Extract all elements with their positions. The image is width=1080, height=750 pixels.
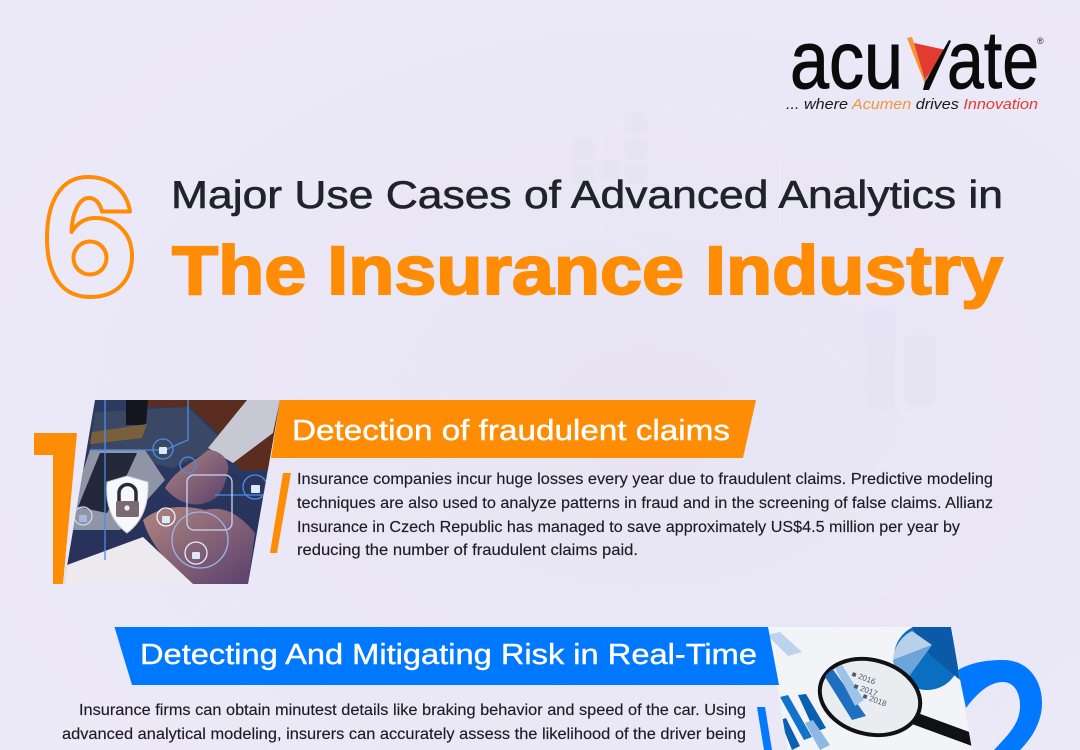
logo black v stroke bbox=[923, 40, 951, 90]
body text: techniques are also used to analyze patterns in fraud and in the screening of false claims. Allianz bbox=[297, 495, 993, 512]
title line 2: The Insurance Industry bbox=[172, 232, 1003, 309]
header bar: detecting and mitigating risk bbox=[114, 627, 779, 685]
title line 1: Major Use Cases of Advanced Analytics in bbox=[171, 174, 1003, 217]
logo wordmark end: ate bbox=[947, 15, 1039, 106]
magnifier lens: ■ 2016 bbox=[850, 669, 877, 687]
body text: reducing the number of fraudulent claims paid. bbox=[297, 542, 638, 559]
pie chart bbox=[893, 624, 960, 690]
logo orange stripe bbox=[907, 37, 928, 84]
body text bbox=[297, 471, 993, 559]
bar chart bbox=[780, 694, 830, 750]
logo registered mark: ® bbox=[1037, 36, 1044, 46]
logo tagline: ... where Acumen drives Innovation bbox=[786, 96, 1038, 113]
numeral 1 bbox=[34, 433, 77, 584]
body text: advanced analytical modeling, insurers can accurately assess the likelihood of the driver being bbox=[62, 726, 746, 743]
photo: hands with security locks bbox=[60, 400, 285, 584]
panel: use case 1 bbox=[34, 400, 993, 584]
logo red triangle bbox=[914, 43, 946, 80]
magnifier lens bbox=[818, 656, 922, 738]
body text: Insurance companies incur huge losses every year due to fraudulent claims. Predictive modeling bbox=[297, 471, 993, 488]
accent slash bbox=[757, 707, 772, 750]
body text bbox=[62, 702, 746, 743]
magnifier lens: ■ 2018 bbox=[861, 691, 888, 709]
logo: acuvate bbox=[786, 15, 1044, 113]
header bar: detection of fraudulent claims: Detection of fraudulent claims bbox=[292, 415, 730, 447]
magnifier handle bbox=[912, 712, 972, 746]
header bar: detection of fraudulent claims bbox=[271, 400, 756, 458]
accent slash bbox=[270, 473, 291, 553]
photo: magnifying glass over charts bbox=[767, 624, 972, 750]
logo wordmark start: acu bbox=[790, 15, 903, 106]
header bar: detecting and mitigating risk: Detecting And Mitigating Risk in Real-Time bbox=[140, 639, 757, 671]
panel: use case 2 bbox=[62, 624, 1042, 750]
numeral 2 bbox=[958, 660, 1042, 750]
shield with padlock bbox=[107, 476, 148, 533]
magnifier lens: ■ 2017 bbox=[852, 681, 879, 699]
title bbox=[171, 174, 1003, 309]
body text: Insurance firms can obtain minutest details like braking behavior and speed of the car. Using bbox=[79, 702, 746, 719]
numeral 6 outline bbox=[47, 177, 132, 297]
body text: Insurance in Czech Republic has managed to save approximately US$4.5 million per year by bbox=[297, 519, 960, 536]
